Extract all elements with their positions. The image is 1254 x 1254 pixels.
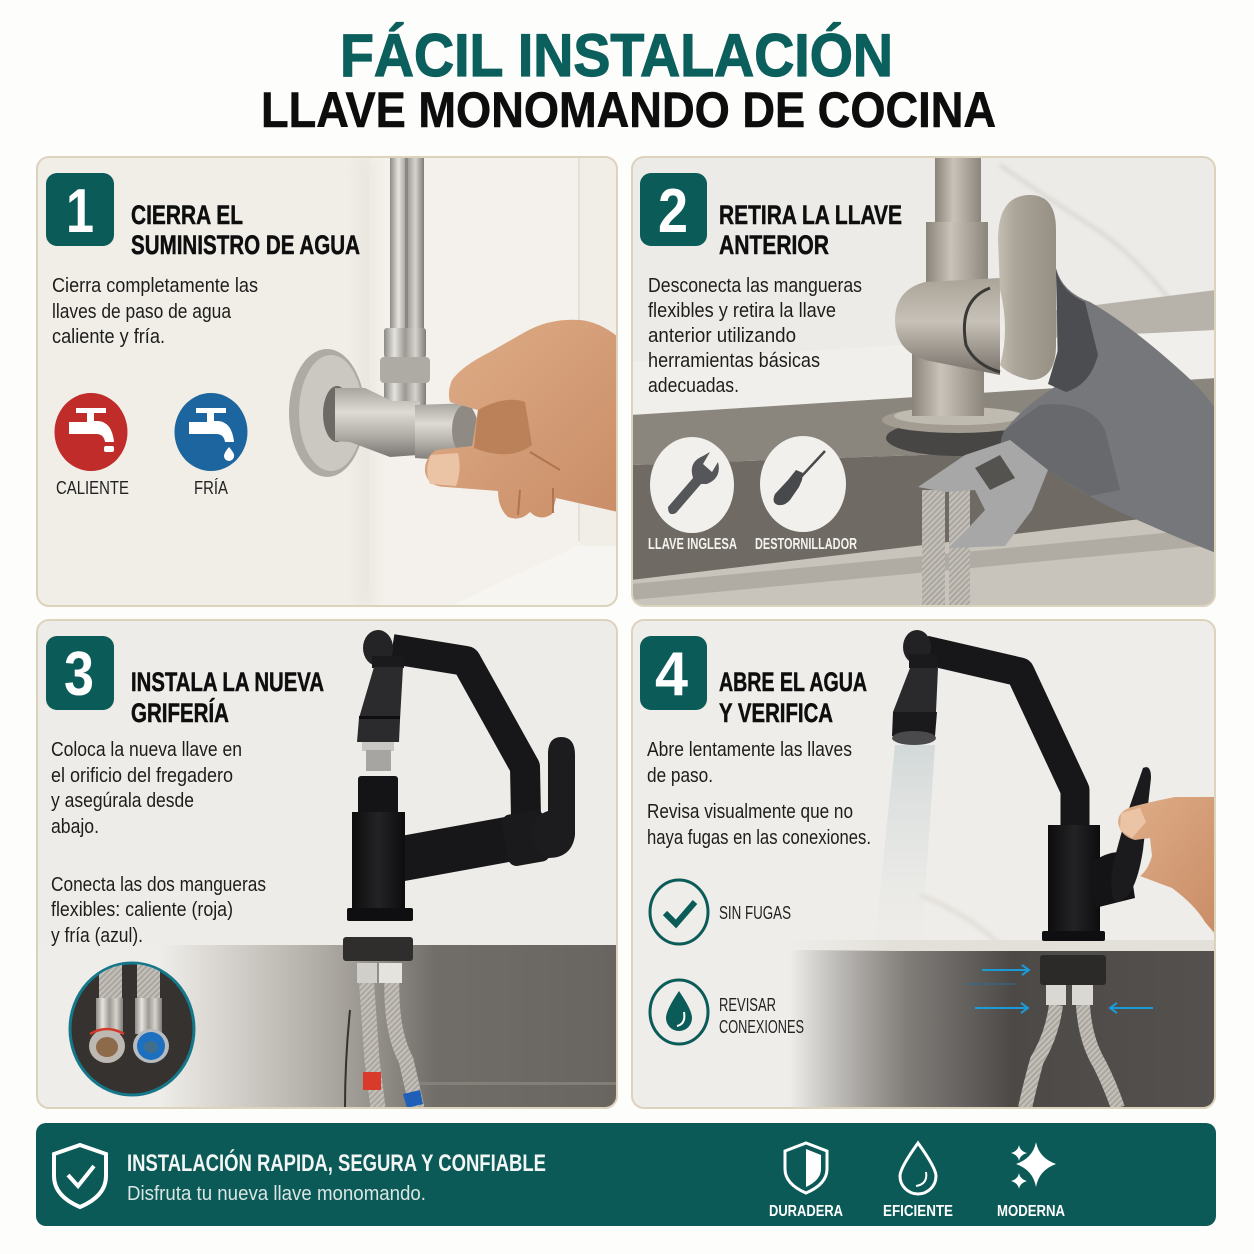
step number badge 4: 4	[655, 640, 688, 709]
text: step 1 description	[52, 275, 258, 348]
icon: check connections drop: CONEXIONES	[719, 1017, 804, 1037]
icon: check connections drop: REVISAR	[719, 995, 776, 1015]
heading 2	[719, 200, 902, 260]
text: step 4 description: de paso.	[647, 765, 713, 787]
icon: blue inspection arrows	[965, 965, 1153, 1013]
step number badge 4	[640, 636, 707, 710]
title: FÁCIL INSTALACIÓN	[340, 22, 893, 89]
text: step 2 description: flexibles y retira la llave	[648, 300, 836, 322]
heading 1: SUMINISTRO DE AGUA	[131, 230, 360, 260]
text: step 3 description: el orificio del fregadero	[51, 765, 233, 787]
icon: durable shield: DURADERA	[769, 1203, 843, 1220]
text: step 3 description: Coloca la nueva llave en	[51, 739, 242, 761]
title: LLAVE MONOMANDO DE COCINA	[261, 82, 996, 138]
title	[261, 22, 996, 138]
heading 2: RETIRA LA LLAVE	[719, 200, 902, 230]
heading 4	[719, 667, 867, 728]
text: step 4 description	[647, 739, 871, 849]
icon: flexible hoses	[345, 963, 423, 1108]
heading 2: ANTERIOR	[719, 230, 829, 260]
icon: hot water	[54, 393, 129, 498]
icon: modern sparkles	[997, 1142, 1065, 1220]
text: step 3 description: y asegúrala desde	[51, 790, 194, 812]
icon: no leaks check: SIN FUGAS	[719, 903, 791, 923]
step number badge 1: 1	[66, 177, 94, 246]
step number badge 3: 3	[64, 640, 94, 709]
text: step 3 description: y fría (azul).	[51, 925, 143, 947]
icon: shield check	[54, 1145, 106, 1207]
water spray	[884, 745, 935, 862]
icon: check connections drop	[650, 980, 804, 1044]
text: step 4 description: Abre lentamente las llaves	[647, 739, 852, 761]
text: step 1 description: Cierra completamente las	[52, 275, 258, 297]
icon: hose connectors close-up	[70, 960, 194, 1095]
step number badge 3	[46, 636, 114, 710]
heading 4: ABRE EL AGUA	[719, 667, 867, 697]
icon: cold water	[174, 393, 248, 498]
icon: brushed faucet	[882, 157, 1056, 456]
heading 3: INSTALA LA NUEVA	[131, 667, 324, 697]
text: step 3 description: flexibles: caliente (roja)	[51, 899, 233, 921]
heading 3: GRIFERÍA	[131, 697, 229, 728]
text: step 4 description: Revisa visualmente que no	[647, 801, 853, 823]
text: step 3 description: Conecta las dos mangueras	[51, 874, 266, 896]
text: step 2 description: Desconecta las mangueras	[648, 275, 862, 297]
icon: durable shield	[769, 1143, 843, 1220]
icon: cold water: FRÍA	[194, 478, 228, 498]
step number badge 1	[46, 173, 114, 246]
icon: efficient drop: EFICIENTE	[883, 1203, 953, 1220]
panel: step 4	[631, 619, 1216, 1109]
icon: modern sparkles: MODERNA	[997, 1203, 1065, 1220]
footer band	[36, 1123, 1216, 1226]
icon: connection hoses	[1025, 985, 1118, 1108]
text: step 2 description	[648, 275, 862, 397]
footer text: Disfruta tu nueva llave monomando.	[127, 1183, 426, 1205]
icon: angle valve	[289, 157, 478, 477]
footer text: INSTALACIÓN RAPIDA, SEGURA Y CONFIABLE	[127, 1149, 546, 1177]
heading 4: Y VERIFICA	[719, 698, 833, 728]
icon: glove and wrench	[918, 268, 1216, 606]
panel: step 3	[36, 619, 618, 1109]
text: step 4 description: haya fugas en las conexiones.	[647, 827, 871, 849]
icon: hand on lever	[1118, 797, 1216, 935]
text: step 1 description: caliente y fría.	[52, 326, 165, 348]
text: step 3 description	[51, 739, 266, 947]
heading 1	[131, 200, 360, 260]
text: step 2 description: herramientas básicas	[648, 350, 820, 372]
icon: matte black faucet in parts	[347, 630, 575, 921]
text: step 2 description: anterior utilizando	[648, 325, 796, 347]
icon: hand	[425, 320, 618, 519]
icon: efficient drop	[883, 1143, 953, 1220]
icon: adjustable wrench	[648, 437, 737, 553]
panel: step 1	[36, 156, 618, 607]
step number badge 2: 2	[658, 177, 688, 246]
icon: screwdriver	[755, 436, 857, 553]
icon: hot water: CALIENTE	[56, 478, 129, 498]
step number badge 2	[640, 173, 707, 246]
panel: step 2	[631, 156, 1216, 607]
icon: matte black faucet with running water	[892, 630, 1151, 941]
icon: no leaks check	[650, 880, 791, 944]
text: step 1 description: llaves de paso de agua	[52, 301, 232, 323]
icon: adjustable wrench: LLAVE INGLESA	[648, 536, 737, 553]
text: step 3 description: abajo.	[51, 816, 99, 838]
heading 1: CIERRA EL	[131, 200, 243, 230]
icon: screwdriver: DESTORNILLADOR	[755, 536, 857, 553]
heading 3	[131, 667, 324, 728]
footer text	[127, 1149, 546, 1205]
text: step 2 description: adecuadas.	[648, 375, 739, 397]
